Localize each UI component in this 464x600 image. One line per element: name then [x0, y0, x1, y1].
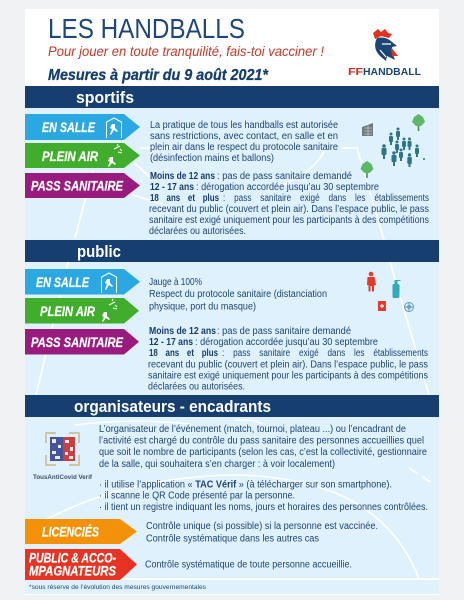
arrow: plein air	[25, 143, 140, 168]
text: pass sanitaire rules	[148, 326, 428, 392]
icon: tree lower	[360, 161, 374, 178]
text: pass sanitaire rules: recevant du public (couvert et plein air). Dans l’espace public, le pass	[148, 360, 428, 370]
arrow: licenciés: LICENCIÉS	[42, 524, 99, 540]
icon: wheel	[404, 302, 414, 312]
text: steps: · il utilise l’application « TAC Vérif » (à télécharger sur son smartphone).	[99, 480, 392, 490]
logo: FFHandball: HANDBALL	[363, 66, 422, 78]
heading: sportifs	[25, 86, 439, 108]
icon: building	[362, 123, 373, 136]
arrow: licenciés	[25, 519, 137, 544]
text: pass sanitaire rules: déclarées ou autorisées.	[148, 382, 245, 392]
text: organisateur	[99, 424, 427, 470]
subtitle: Pour jouer en toute tranquilité, fais-toi vacciner !	[48, 43, 324, 59]
arrow: plein air: PLEIN AIR	[42, 149, 98, 164]
text: public et accompagnateurs: Contrôle systématique de toute personne accueillie.	[145, 560, 352, 570]
heading: sportifs: sportifs	[76, 88, 134, 107]
text: pratique	[150, 120, 338, 164]
text: licenciés: Contrôle unique (si possible) si la personne est vaccinée.	[146, 521, 378, 532]
icon: gel bottle	[392, 280, 400, 298]
logo: FFHandball	[348, 29, 422, 78]
arrow: pass sanitaire	[25, 329, 139, 354]
text: licenciés: Contrôle systématique dans les autres cas	[146, 534, 319, 544]
text: pass sanitaire rules: : dérogation accordée jusqu’au 30 septembre	[196, 182, 379, 193]
heading: organisateurs	[25, 395, 439, 417]
text: pass sanitaire rules: Moins de 12 ans	[150, 171, 215, 182]
arrow: public et accompagnateurs	[25, 549, 137, 580]
text: pass sanitaire rules: : dérogation accordée jusqu’au 30 septembre	[195, 337, 378, 348]
arrow: en salle: EN SALLE	[42, 120, 96, 135]
heading: public: public	[77, 242, 121, 261]
arrow: pass sanitaire: PASS SANITAIRE	[31, 335, 124, 350]
icon: QR code	[33, 433, 93, 481]
text: pass sanitaire rules: 18 ans et plus	[150, 193, 219, 204]
logo: FFHandball: FF	[348, 66, 364, 78]
text: pass sanitaire rules: 12 - 17 ans	[150, 182, 194, 193]
heading: public	[25, 240, 439, 262]
text: steps: · il scanne le QR Code présenté par la personne.	[99, 490, 295, 502]
arrow: en salle	[25, 114, 140, 140]
arrow: pass sanitaire: PASS SANITAIRE	[31, 178, 124, 194]
title: LES HANDBALLS	[48, 13, 245, 44]
icon: tree top	[412, 114, 425, 131]
text: pass sanitaire rules	[149, 171, 429, 237]
arrow: en salle: EN SALLE	[36, 275, 90, 290]
text: organisateur: l’activité est chargé du contrôle du pass sanitaire des personnes accueillies quel	[99, 436, 424, 446]
icon: crowd	[382, 128, 425, 167]
panel: organisateurs - encadrants	[25, 395, 439, 591]
arrow: pass sanitaire	[25, 173, 140, 198]
header	[48, 13, 422, 84]
text: pass sanitaire rules: sanitaire est exigé uniquement pour les participants à des compétitions	[149, 215, 429, 226]
text: pass sanitaire rules: recevant du public (couvert et plein air). Dans l’espace public, le pass	[149, 204, 429, 215]
panel: sportifs	[25, 86, 439, 237]
text: pratique: sans restrictions, avec contact, en salle et en	[150, 131, 338, 142]
text: pratique: (désinfection mains et ballons)	[150, 153, 274, 164]
arrow: public et accompagnateurs: MPAGNATEURS	[29, 564, 116, 578]
text: pratique: La pratique de tous les handballs est autorisée	[150, 120, 338, 131]
text: jauge: physique, port du masque)	[149, 302, 256, 312]
text: pass sanitaire rules: 12 - 17 ans	[149, 337, 193, 348]
arrow: en salle	[25, 269, 140, 294]
text: pass sanitaire rules: sanitaire est exigé uniquement pour les participants à des compétitions	[148, 370, 428, 382]
text: pass sanitaire rules: déclarées ou autorisées.	[149, 226, 246, 237]
icon: QR code: TousAntiCovid Verif	[33, 474, 93, 481]
text: jauge: Jauge à 100%	[149, 277, 202, 288]
date heading: Mesures à partir du 9 août 2021*	[48, 67, 269, 84]
arrow: plein air: PLEIN AIR	[40, 304, 95, 319]
text: organisateur: que soit le nombre de participants (selon les cas, c’est la collectivité, gestionnaire	[99, 447, 427, 458]
footnote: *sous réserve de l’évolution des mesures gouvernementales	[29, 584, 207, 591]
panel: public	[25, 240, 439, 392]
text: organisateur: de la salle, qui souhaitera s’en charger : à voir localement)	[99, 459, 335, 470]
icon: person with mask	[367, 272, 376, 292]
arrow: plein air	[25, 298, 139, 324]
text: pass sanitaire rules: : pas de pass sanitaire demandé	[217, 171, 352, 182]
arrow: public et accompagnateurs: PUBLIC & ACCO-	[29, 550, 116, 566]
text: organisateur: L’organisateur de l’événement (match, tournoi, plateau ...) ou l’encadrant de	[99, 424, 406, 435]
text: jauge: Respect du protocole sanitaire (distanciation	[149, 289, 327, 300]
icon: first aid	[378, 301, 386, 311]
text: pass sanitaire rules: : pas de pass sanitaire demandé	[217, 326, 351, 337]
text: licenciés	[146, 521, 378, 544]
text: steps: · il tient un registre indiquant les noms, jours et horaires des personnes contrôlées.	[99, 502, 428, 513]
text: pratique: plein air dans le respect du protocole sanitaire	[150, 142, 338, 153]
heading: organisateurs: organisateurs - encadrants	[74, 397, 271, 416]
text: pass sanitaire rules: 18 ans et plus	[149, 348, 218, 359]
text: steps	[99, 480, 428, 513]
text: pass sanitaire rules: Moins de 12 ans	[149, 326, 216, 337]
text: jauge	[149, 277, 327, 312]
